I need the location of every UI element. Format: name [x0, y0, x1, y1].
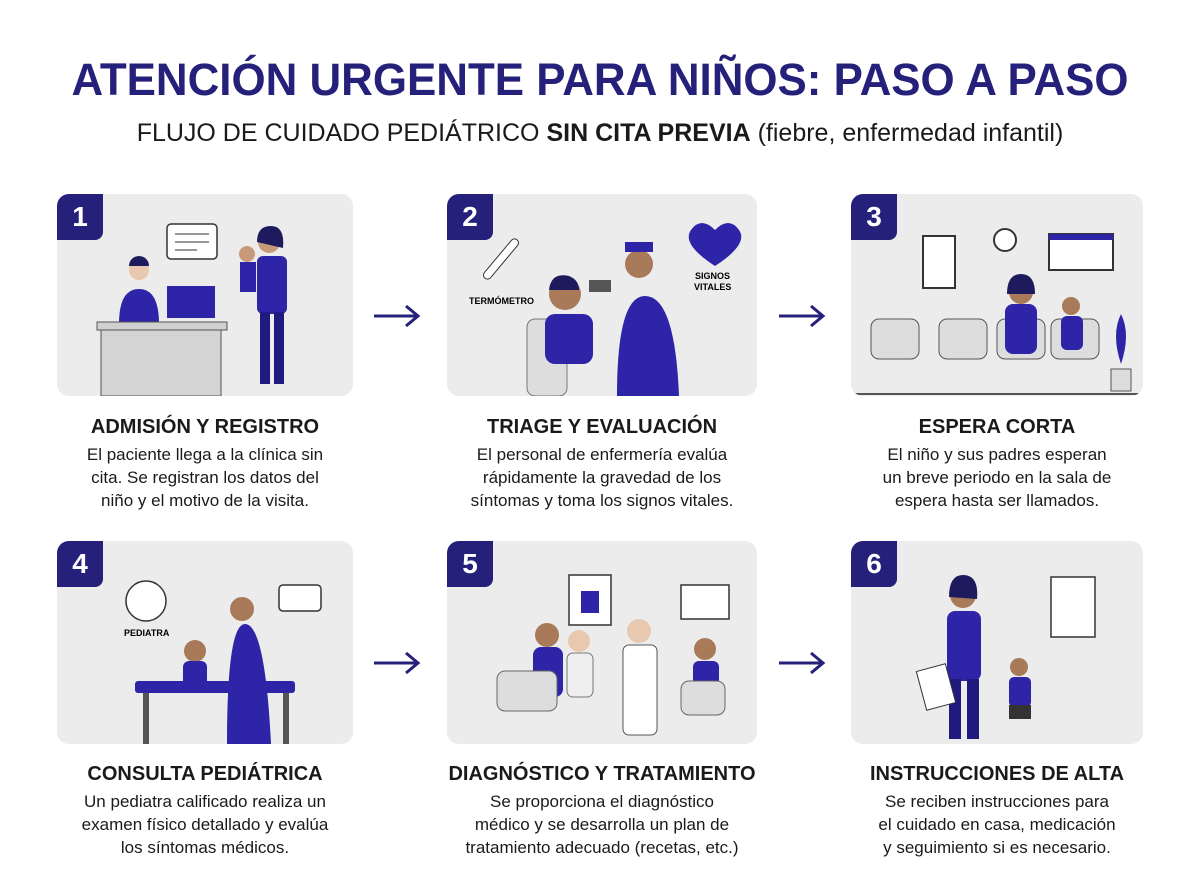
badge 1 — [57, 194, 103, 240]
panel 1: admisión — [57, 194, 353, 396]
caption 5 — [448, 762, 756, 857]
panel 5: diagnóstico — [447, 541, 757, 744]
badge 1: 1 — [72, 201, 88, 232]
arrow 1-2 — [374, 304, 420, 328]
caption 4: Un pediatra calificado realiza un — [84, 792, 326, 811]
caption 6: el cuidado en casa, medicación — [878, 815, 1116, 834]
badge 5 — [447, 541, 493, 587]
caption 3: ESPERA CORTA — [919, 416, 1075, 438]
caption 2: TRIAGE Y EVALUACIÓN — [487, 416, 717, 438]
title: ATENCIÓN URGENTE PARA NIÑOS: PASO A PASO — [71, 54, 1129, 105]
caption 2: rápidamente la gravedad de los — [483, 468, 721, 487]
caption 5: Se proporciona el diagnóstico — [490, 792, 714, 811]
caption 3: un breve periodo en la sala de — [883, 468, 1111, 487]
caption 6: y seguimiento si es necesario. — [883, 838, 1111, 857]
badge 5: 5 — [462, 548, 478, 579]
arrow 2-3 — [779, 304, 826, 328]
badge 3: 3 — [866, 201, 882, 232]
caption 5: tratamiento adecuado (recetas, etc.) — [465, 838, 739, 857]
caption 5: DIAGNÓSTICO Y TRATAMIENTO — [448, 763, 756, 785]
badge 4: 4 — [72, 548, 88, 579]
caption 6: Se reciben instrucciones para — [885, 792, 1109, 811]
caption 4: CONSULTA PEDIÁTRICA — [87, 763, 323, 785]
caption 4 — [82, 762, 328, 857]
caption 1: niño y el motivo de la visita. — [101, 491, 309, 510]
caption 3 — [883, 416, 1111, 510]
arrow 4-5 — [374, 652, 420, 674]
caption 2: El personal de enfermería evalúa — [477, 445, 727, 464]
caption 6: INSTRUCCIONES DE ALTA — [870, 763, 1124, 785]
panel 2: triage: SIGNOS — [695, 271, 730, 281]
caption 1: El paciente llega a la clínica sin — [87, 445, 323, 464]
caption 2 — [471, 414, 733, 510]
badge 6 — [851, 541, 897, 587]
panel 2: triage: TERMÓMETRO — [469, 295, 534, 306]
caption 1: ADMISIÓN Y REGISTRO — [91, 416, 319, 438]
badge 3 — [851, 194, 897, 240]
panel 2: triage — [447, 194, 757, 396]
caption 1: cita. Se registran los datos del — [91, 468, 319, 487]
panel 4: consulta: PEDIATRA — [124, 628, 170, 638]
panel 2: triage: VITALES — [694, 282, 731, 292]
caption 3: espera hasta ser llamados. — [895, 491, 1099, 510]
caption 4: los síntomas médicos. — [121, 838, 289, 857]
caption 2: síntomas y toma los signos vitales. — [471, 491, 733, 510]
panel 4: consulta — [57, 541, 353, 744]
arrow 5-6 — [779, 652, 826, 674]
panel 3: espera — [851, 194, 1143, 396]
caption 3: El niño y sus padres esperan — [887, 445, 1107, 464]
badge 2: 2 — [462, 201, 478, 232]
badge 6: 6 — [866, 548, 882, 579]
panel 6: alta — [851, 541, 1143, 744]
badge 4 — [57, 541, 103, 587]
caption 5: médico y se desarrolla un plan de — [475, 815, 729, 834]
caption 4: examen físico detallado y evalúa — [82, 815, 328, 834]
badge 2 — [447, 194, 493, 240]
caption 1 — [87, 414, 323, 510]
subtitle: FLUJO DE CUIDADO PEDIÁTRICO SIN CITA PREVIA (fiebre, enfermedad infantil) — [137, 119, 1063, 147]
caption 6 — [870, 763, 1124, 857]
